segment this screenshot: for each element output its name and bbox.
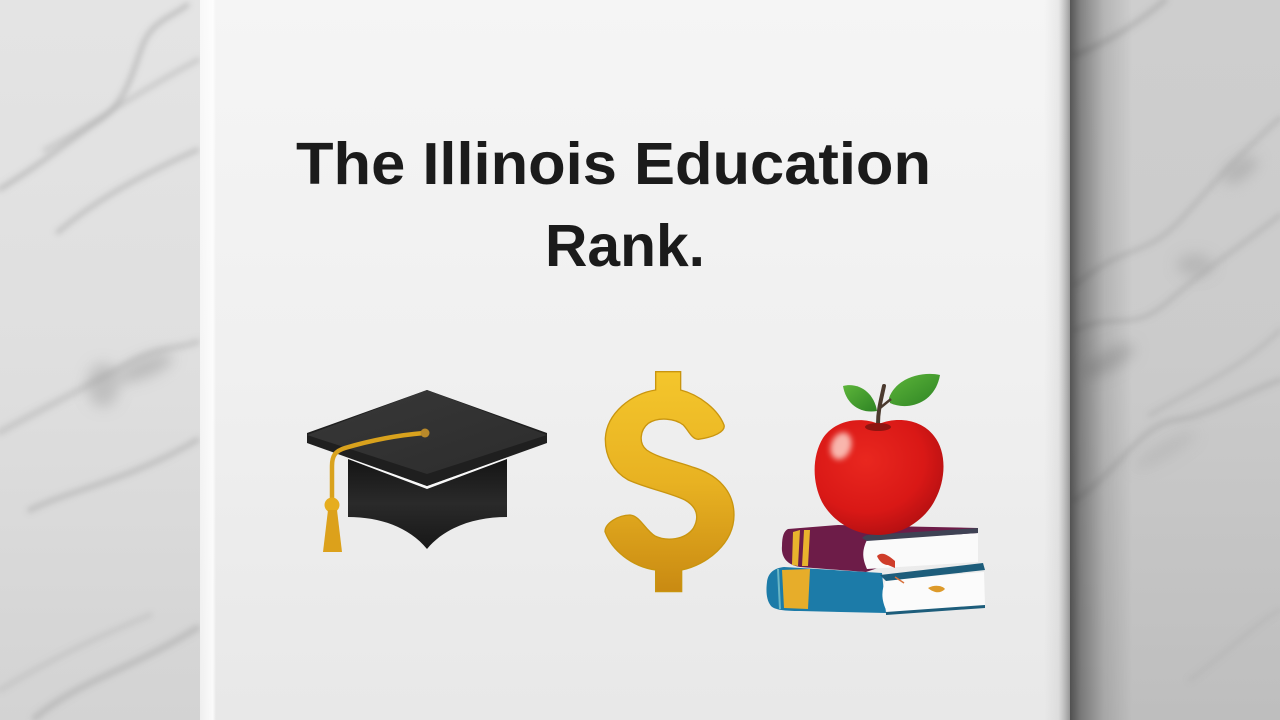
left leaf	[843, 385, 877, 412]
icon: graduation cap	[307, 390, 547, 552]
icon: dollar sign	[605, 372, 734, 592]
tassel cord	[332, 433, 424, 500]
lower blue book	[766, 563, 985, 615]
right leaf	[889, 374, 940, 406]
white edge under board	[348, 457, 507, 489]
card shadow	[1070, 0, 1132, 720]
title: The Illinois Education	[296, 131, 931, 197]
tassel	[323, 510, 342, 552]
icon: apple on books	[766, 374, 985, 615]
mortarboard	[307, 390, 547, 486]
title	[296, 131, 931, 279]
apple body	[815, 420, 944, 535]
white card panel	[200, 0, 1070, 720]
title: Rank.	[545, 213, 705, 279]
cap base	[348, 458, 507, 549]
upper purple book	[782, 525, 978, 572]
stem	[878, 386, 884, 424]
apple highlight	[827, 429, 855, 463]
